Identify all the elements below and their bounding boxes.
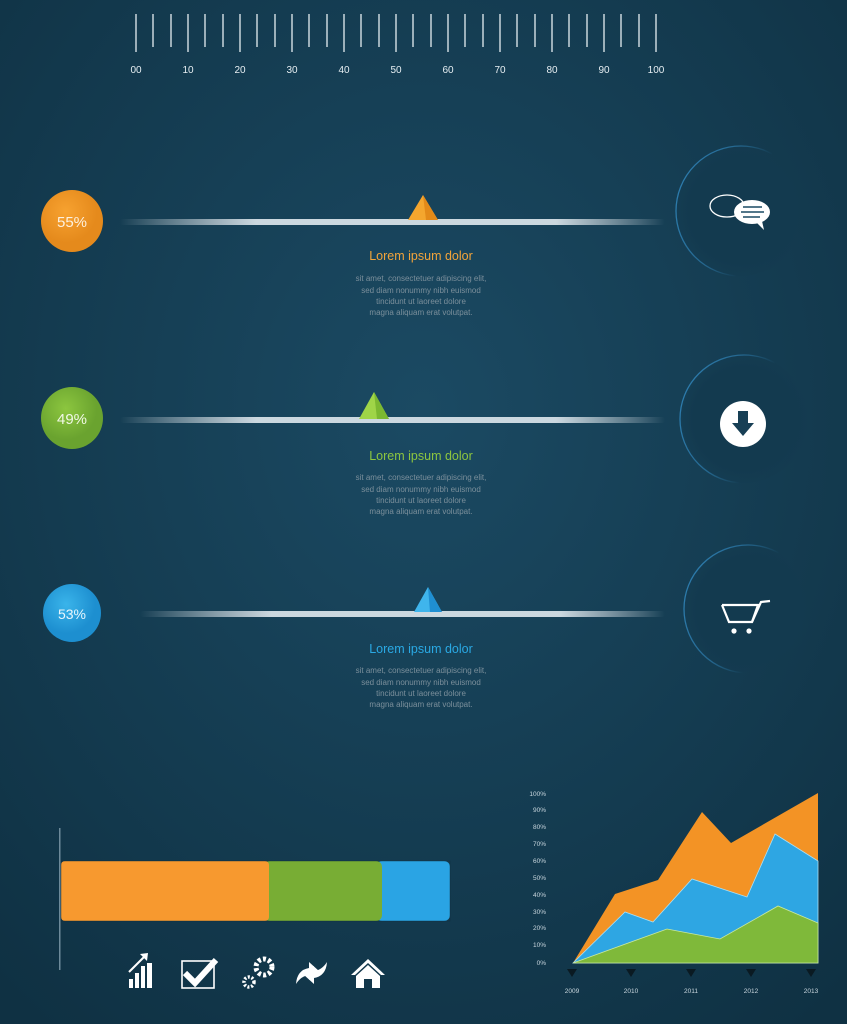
badge 53%: [43, 584, 101, 642]
area chart: 0%: [537, 960, 546, 967]
body text: sit amet, consectetuer adipiscing elit,: [356, 473, 486, 482]
body text: tincidunt ut laoreet dolore: [376, 689, 466, 698]
marker triangle: [414, 587, 442, 612]
area chart: 10%: [533, 942, 546, 949]
blue series: [573, 834, 818, 963]
area chart: 20%: [533, 925, 546, 932]
badge 49%: [41, 387, 103, 449]
icon: chart up: [129, 953, 152, 988]
ruler scale: 30: [286, 65, 298, 76]
heading: Lorem ipsum dolor: [369, 249, 473, 263]
marker triangle: [359, 392, 389, 419]
area chart: 70%: [533, 841, 546, 848]
stacked bar: [59, 828, 450, 970]
body text: sed diam nonummy nibh euismod: [361, 678, 481, 687]
body text: magna aliquam erat volutpat.: [369, 308, 473, 317]
marker triangle: [408, 195, 438, 220]
area chart: 2013: [804, 988, 819, 995]
icon: gears: [244, 959, 272, 987]
ruler scale: [130, 14, 665, 76]
area chart: 2010: [624, 988, 639, 995]
badge 55%: 55%: [57, 214, 87, 231]
ruler scale: 00: [130, 65, 142, 76]
year markers: [567, 969, 816, 977]
body text: tincidunt ut laoreet dolore: [376, 496, 466, 505]
body text: magna aliquam erat volutpat.: [369, 507, 473, 516]
body text: sed diam nonummy nibh euismod: [361, 485, 481, 494]
badge 53%: 53%: [58, 606, 86, 622]
area chart: 2011: [684, 988, 698, 995]
ruler scale: 10: [182, 65, 194, 76]
area chart: 2009: [565, 988, 580, 995]
badge 55%: [41, 190, 103, 252]
icon: refresh arrows: [296, 962, 327, 984]
slider line: [120, 417, 665, 423]
area chart: 40%: [533, 892, 546, 899]
heading: Lorem ipsum dolor: [369, 642, 473, 656]
area chart: 30%: [533, 909, 546, 916]
icon circle: download: [680, 355, 808, 483]
area chart: 100%: [529, 791, 546, 798]
ruler scale: 90: [598, 65, 610, 76]
ruler scale: 70: [494, 65, 506, 76]
slider line: [140, 611, 665, 617]
icon: checkbox: [182, 960, 216, 988]
icon: home: [351, 959, 385, 988]
row 3: blue: [43, 545, 812, 709]
body text: magna aliquam erat volutpat.: [369, 700, 473, 709]
body text: [356, 274, 486, 317]
area chart: 80%: [533, 824, 546, 831]
area chart: 90%: [533, 807, 546, 814]
body text: [356, 666, 486, 709]
icon circle: chat: [676, 146, 806, 276]
ruler scale: 50: [390, 65, 402, 76]
body text: sit amet, consectetuer adipiscing elit,: [356, 666, 486, 675]
ruler scale: 40: [338, 65, 350, 76]
icon circle: cart: [684, 545, 812, 673]
row 2: green: [41, 355, 808, 516]
ruler scale: 80: [546, 65, 558, 76]
heading: Lorem ipsum dolor: [369, 449, 473, 463]
badge 49%: 49%: [57, 411, 87, 428]
slider line: [120, 219, 665, 225]
row 1: orange: [41, 146, 806, 317]
green series: [573, 906, 818, 963]
orange series: [573, 793, 818, 963]
area chart: 2012: [744, 988, 759, 995]
area chart: [529, 791, 819, 995]
body text: [356, 473, 486, 516]
area chart: 50%: [533, 875, 546, 882]
body text: sit amet, consectetuer adipiscing elit,: [356, 274, 486, 283]
area chart: 60%: [533, 858, 546, 865]
body text: sed diam nonummy nibh euismod: [361, 286, 481, 295]
ruler scale: 100: [648, 65, 665, 76]
icon row: [129, 953, 385, 988]
ruler scale: 20: [234, 65, 246, 76]
body text: tincidunt ut laoreet dolore: [376, 297, 466, 306]
ruler scale: 60: [442, 65, 454, 76]
